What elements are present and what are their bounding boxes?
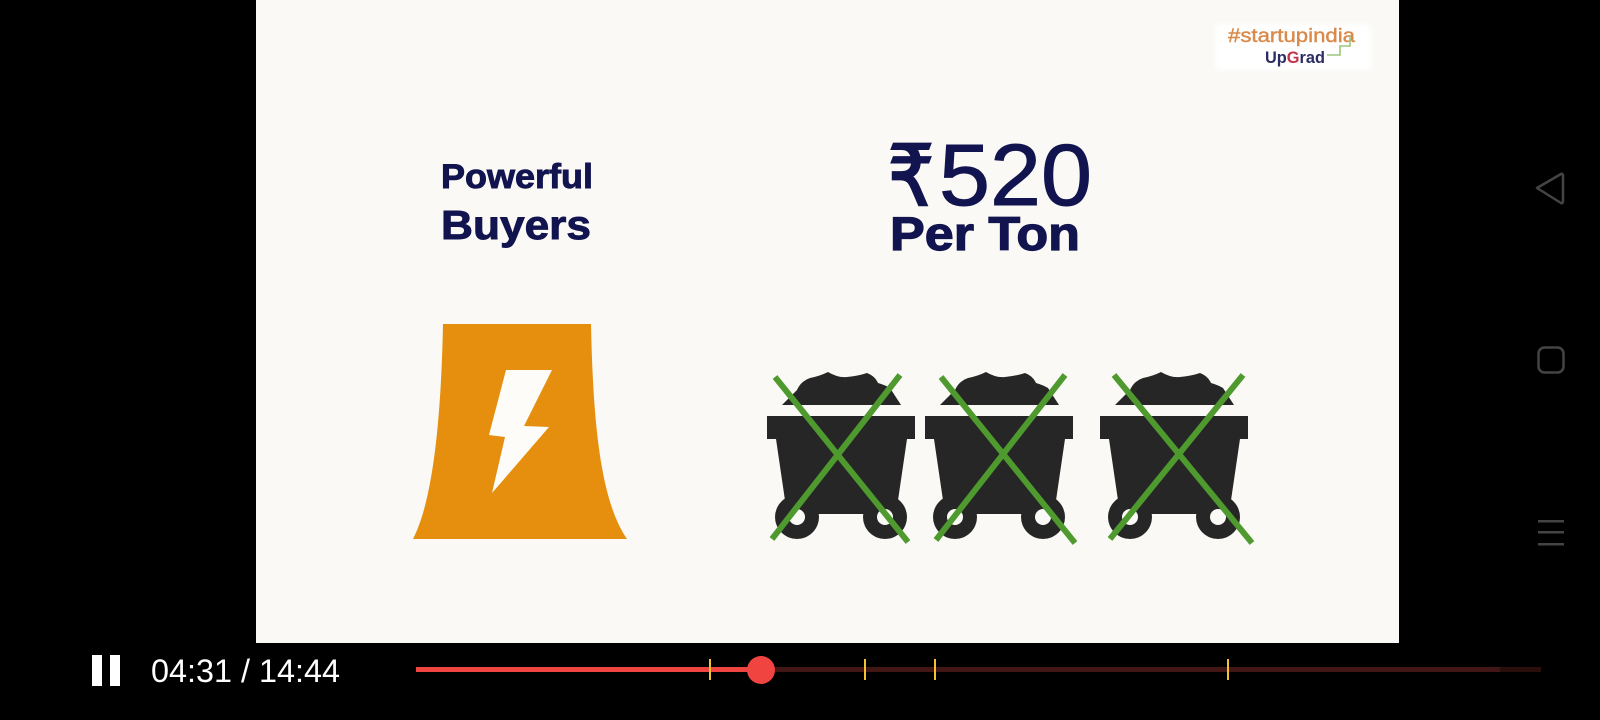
icon: android menu button (1538, 520, 1564, 546)
icon: android back button (1537, 174, 1563, 203)
heading: price per ton: Per Ton (890, 207, 1080, 260)
video slide background (256, 0, 1399, 643)
heading: Powerful Buyers: Buyers (441, 202, 591, 248)
icon: crossed-out coal cart 3 (1100, 372, 1252, 543)
logo: startupindia and UpGrad: UpGrad (1265, 48, 1325, 67)
icon: crossed-out coal cart 1 (767, 372, 915, 542)
icon: orange power plant cooling tower with lightning bolt (413, 324, 627, 539)
icon: crossed-out coal cart 2 (925, 372, 1075, 543)
logo: startupindia and UpGrad (1215, 24, 1371, 70)
heading: price per ton (888, 127, 1092, 260)
logo: startupindia and UpGrad: #startupindia (1228, 26, 1356, 47)
heading: Powerful Buyers (441, 158, 593, 248)
heading: price per ton: ₹ (888, 127, 934, 225)
heading: Powerful Buyers: Powerful (441, 158, 593, 196)
heading: price per ton: 520 (939, 127, 1092, 224)
video progress bar (416, 656, 1541, 684)
video timestamp: 04:31 / 14:44 (151, 653, 340, 689)
icon: pause button (92, 655, 120, 686)
icon: android home button (1538, 348, 1564, 372)
